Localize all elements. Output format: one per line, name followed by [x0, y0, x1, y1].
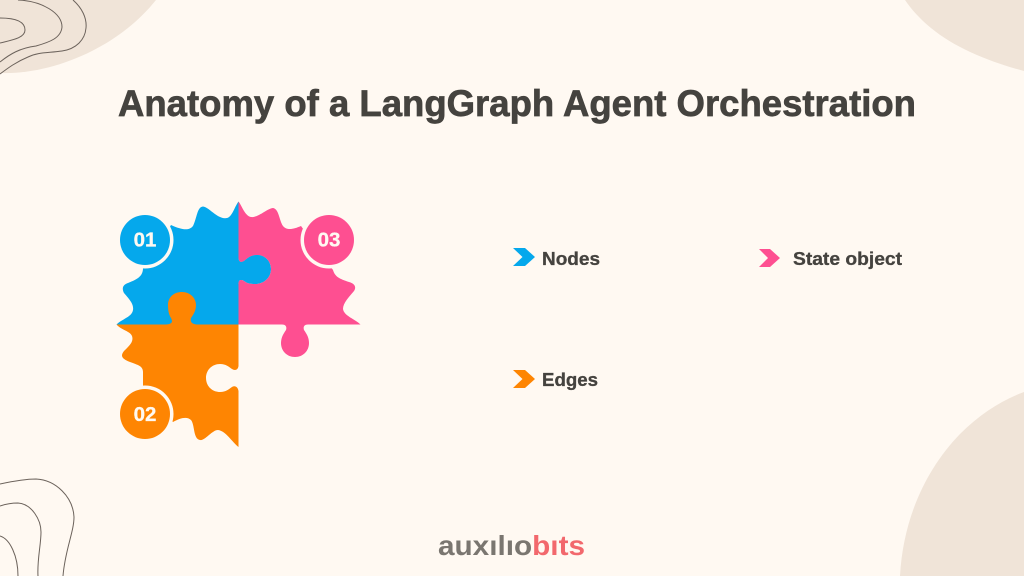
logo: auxiliobits: auxılıobıts: [438, 530, 585, 561]
decorative blob: bottom right: [900, 392, 1024, 576]
step badge 03: 03: [318, 228, 340, 252]
title: Anatomy of a LangGraph Agent Orchestration: [118, 83, 916, 124]
decorative contour lines: bottom left: [0, 479, 74, 576]
decorative blob: top right: [905, 0, 1024, 71]
puzzle graphic: [116, 202, 360, 447]
puzzle piece: blue: [116, 202, 271, 324]
decorative blob: top left with contour lines: [0, 0, 156, 74]
step badge 02: 02: [134, 403, 156, 426]
step badge 01: [116, 212, 174, 268]
puzzle piece: pink: [238, 202, 360, 357]
legend item: State object: State object: [793, 249, 902, 269]
legend item: Nodes: [513, 248, 600, 269]
step badge 01: 01: [134, 228, 156, 252]
puzzle piece: orange: [116, 292, 238, 447]
legend item: Edges: Edges: [542, 370, 598, 390]
legend item: Edges: [513, 370, 598, 390]
step badge 03: [300, 212, 358, 268]
legend item: Nodes: Nodes: [542, 249, 600, 269]
blue tab over pink: [238, 255, 270, 284]
step badge 02: [116, 386, 174, 442]
